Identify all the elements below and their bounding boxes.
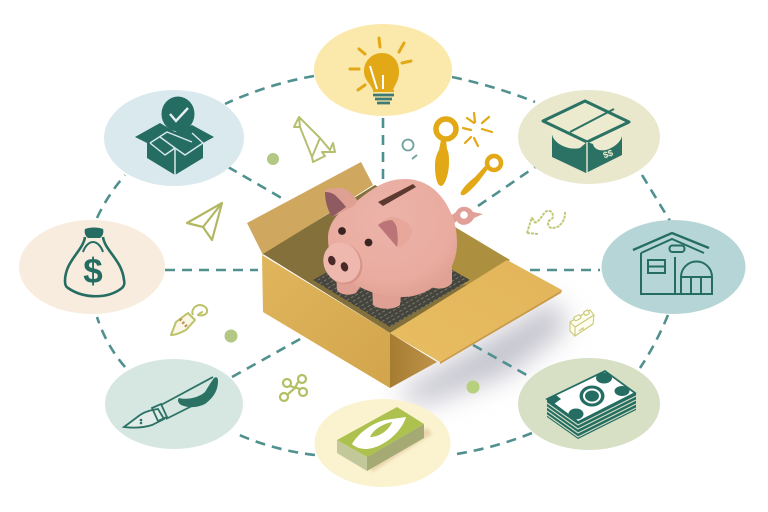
decorative: green dots bbox=[224, 153, 279, 342]
icon: warehouse building bbox=[633, 233, 712, 294]
woven mat bbox=[313, 236, 470, 327]
box interior bbox=[263, 185, 510, 333]
decorative: small knife bbox=[171, 305, 207, 335]
panel: warehouse bbox=[602, 220, 746, 314]
pig feet bbox=[336, 259, 452, 309]
icon: money bag bbox=[65, 228, 124, 296]
pig right ear bbox=[378, 217, 412, 248]
decorative: green dot on shadow bbox=[466, 380, 480, 394]
decorative: paper plane bbox=[187, 203, 222, 240]
box front flap bbox=[390, 260, 562, 362]
box front left face bbox=[262, 255, 390, 388]
icon: green banknote bundle bbox=[337, 407, 432, 472]
icon: open cardboard box: $$ bbox=[602, 148, 614, 160]
panel: checked parcel bbox=[104, 90, 244, 186]
piggy bank bbox=[317, 179, 483, 309]
decorative: origami bird bbox=[294, 117, 335, 162]
pig snout bbox=[317, 236, 369, 291]
decorative: squiggle arrow bbox=[527, 211, 565, 234]
icon: fountain pen bbox=[124, 377, 218, 428]
panel: stack of cash bbox=[518, 358, 660, 450]
icon: open cardboard box bbox=[543, 101, 629, 173]
box back flap bbox=[247, 162, 373, 255]
pig coin slot bbox=[378, 184, 416, 206]
dashed connector network bbox=[97, 76, 670, 455]
panel: pen knife bbox=[105, 359, 243, 449]
pig left ear bbox=[325, 188, 357, 217]
panel: light bulb idea bbox=[314, 24, 452, 116]
cardboard box with piggy bank bbox=[247, 162, 562, 388]
icon: small key bbox=[461, 156, 501, 195]
pig eyes bbox=[338, 227, 346, 235]
icon: stacked banknotes bbox=[547, 371, 636, 439]
icon: money bag: $ bbox=[83, 252, 103, 291]
panel: money bag bbox=[19, 220, 165, 314]
pig body bbox=[328, 179, 457, 297]
panel: open parcel bbox=[518, 90, 660, 184]
pig tail bbox=[446, 207, 483, 227]
decorative: knot clover bbox=[280, 375, 307, 401]
icon: box with check mark bbox=[135, 96, 214, 175]
icon: key with ring bbox=[435, 119, 456, 186]
box front right face bbox=[390, 333, 437, 388]
panel: cash bundle bbox=[314, 399, 450, 487]
icon: light bulb bbox=[350, 38, 411, 103]
icon: sparkle bbox=[463, 113, 492, 146]
decorative: small ring and dash bbox=[402, 140, 417, 159]
decorative: mini parcel bbox=[570, 310, 594, 336]
box floor shadow bbox=[395, 299, 567, 405]
